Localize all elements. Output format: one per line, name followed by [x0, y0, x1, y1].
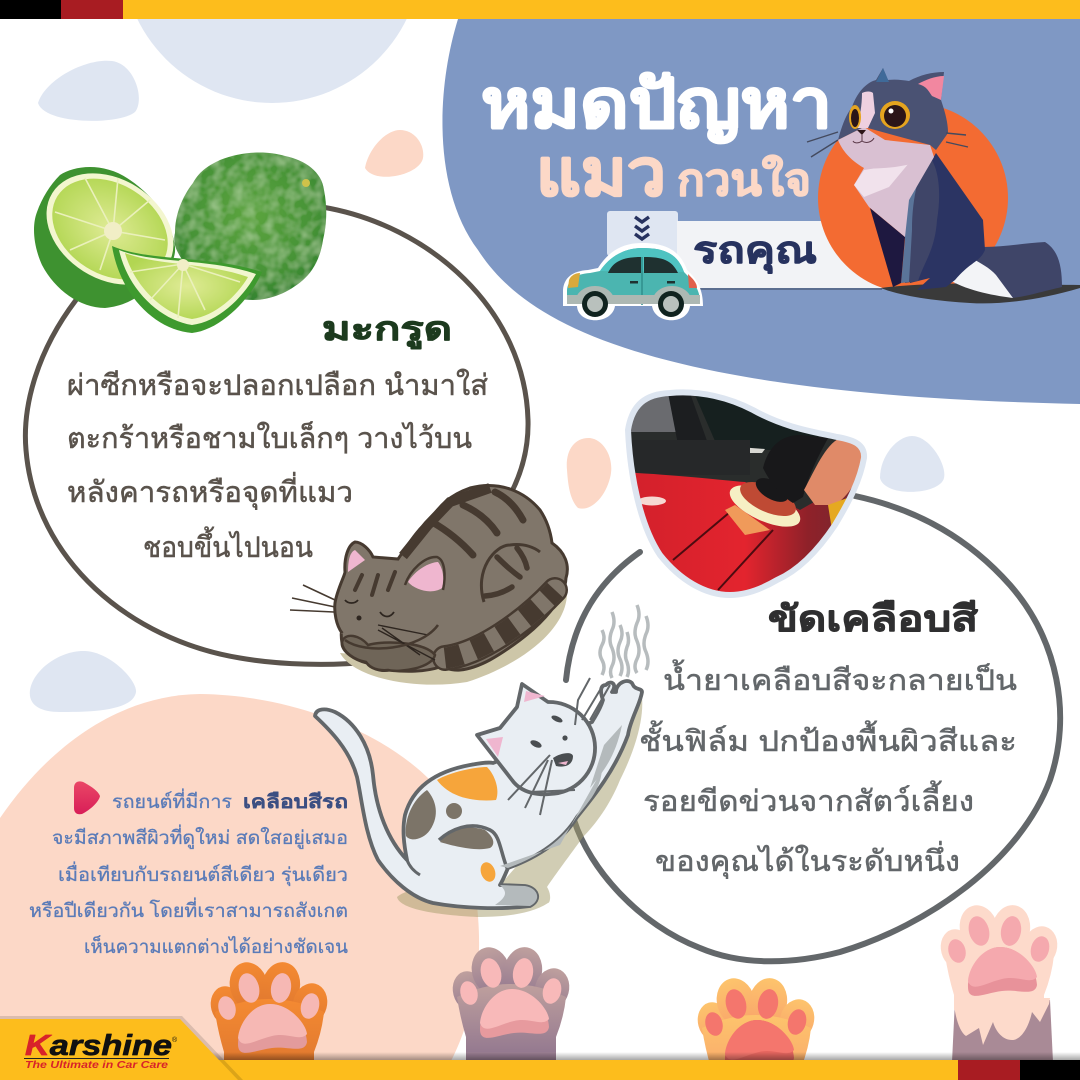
panel: blue title header	[442, 19, 1080, 404]
text block: kaffir lime instructions: ผ่าซีกหรือจะปลอกเปลือก นำมาใส่	[67, 368, 488, 402]
heading: kaffir lime: มะกรูด	[322, 310, 452, 350]
background blob: pale blue pebble top-left	[38, 61, 139, 121]
logo: Karshine: The Ultimate in Car Care	[25, 1060, 169, 1071]
icon: red play bullet	[74, 781, 100, 814]
logo: Karshine: ®	[172, 1036, 178, 1044]
text block: paint polish explanation: รอยขีดข่วนจากสัตว์เลี้ยง	[643, 780, 974, 818]
text block: coated car note: รถยนต์ที่มีการ	[112, 788, 232, 813]
background blob: pale blue pebble right	[880, 436, 944, 492]
text block: coated car note: หรือปีเดียวกัน โดยที่เราสามารถสังเกต	[29, 897, 348, 922]
background blob: peach pebble top	[365, 130, 423, 177]
photo: polishing red car	[620, 388, 870, 603]
illustration: navy cat on orange circle	[807, 68, 1080, 303]
paw: peach with mauve sleeve	[936, 901, 1062, 1062]
text block: coated car note: เห็นความแตกต่างได้อย่างชัดเจน	[84, 934, 348, 958]
label: your car: รถคุณ	[693, 230, 817, 274]
bar: top brand stripe	[0, 0, 1080, 19]
text block: paint polish explanation: น้ำยาเคลือบสีจะกลายเป็น	[663, 659, 1017, 697]
text block: paint polish explanation: ของคุณได้ในระดับหนึ่ง	[655, 841, 960, 879]
text block: kaffir lime instructions: ตะกร้าหรือชามใบเล็กๆ วางไว้บน	[67, 420, 472, 455]
panel: peach bottom-left	[0, 694, 479, 1080]
text block: coated car note: จะมีสภาพสีผิวที่ดูใหม่ สดใสอยู่เสมอ	[52, 824, 348, 849]
text block: kaffir lime instructions: หลังคารถหรือจุดที่แมว	[67, 472, 353, 510]
heading: title line 2: แมว	[536, 136, 666, 209]
background blob: pale circle top	[122, 0, 422, 103]
logo: Karshine	[0, 1016, 243, 1080]
label: your car	[607, 211, 882, 290]
icon: teal car	[563, 243, 703, 320]
background blob: pale blue pebble left	[30, 651, 136, 712]
panel: paint polish outline	[566, 496, 1060, 961]
text block: paint polish explanation	[639, 659, 1017, 879]
text block: paint polish explanation: ชั้นฟิล์ม ปกป้องพื้นผิวสีและ	[639, 720, 1017, 758]
background blob: peach pebble middle	[567, 438, 611, 509]
illustration: sleeping tabby cat	[290, 485, 567, 685]
heading: title line 1: หมดปัญหา	[481, 67, 832, 143]
heading: paint polish: ขัดเคลือบสี	[768, 598, 978, 639]
illustration: kaffir limes	[26, 151, 326, 333]
text block: coated car note: เมื่อเทียบกับรถยนต์สีเดียว รุ่นเดียว	[58, 861, 348, 887]
paw: mauve	[448, 943, 574, 1062]
illustration: scratching calico cat	[315, 605, 648, 917]
paw: yellow-orange	[693, 974, 819, 1080]
heading: title line 2	[536, 136, 811, 209]
heading: title line 2: กวนใจ	[677, 154, 811, 205]
paw: orange	[206, 958, 332, 1067]
text block: coated car note	[29, 788, 348, 958]
text block: coated car note: เคลือบสีรถ	[243, 791, 348, 813]
text block: kaffir lime instructions: ชอบขึ้นไปนอน	[143, 526, 313, 564]
text block: kaffir lime instructions	[67, 368, 488, 564]
bar: bottom brand stripe	[0, 1052, 1080, 1080]
logo: Karshine: Karshine	[25, 1030, 172, 1062]
panel: kaffir lime outline	[25, 207, 528, 664]
